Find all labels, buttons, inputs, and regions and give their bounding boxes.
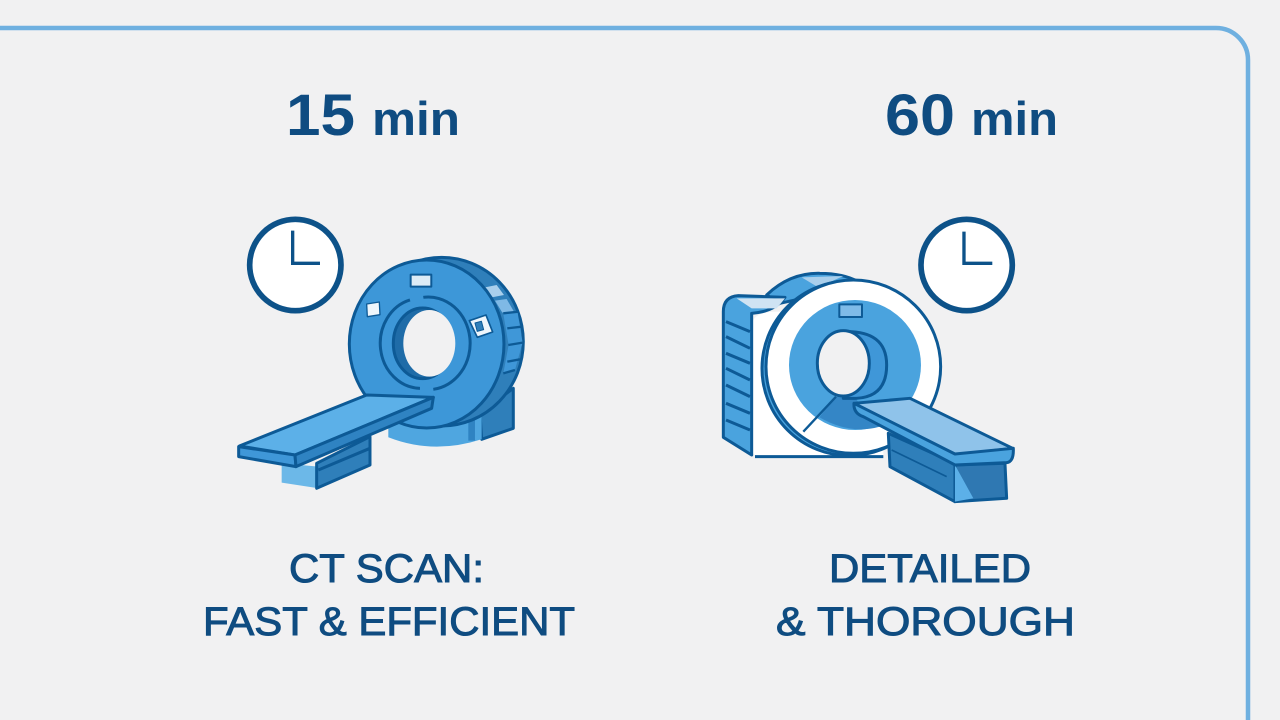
icon: CT scanner <box>239 257 523 488</box>
inner blue disc <box>789 300 921 430</box>
icon: MRI clock <box>921 219 1012 311</box>
panel: CT scan <box>203 83 575 644</box>
lower wedge <box>819 397 880 429</box>
CT caption: FAST & EFFICIENT <box>203 600 575 644</box>
ring rim <box>762 281 937 456</box>
MRI caption: & THOROUGH <box>776 600 1075 644</box>
MRI time: 60 min: min <box>971 92 1058 145</box>
patient table <box>854 398 1013 502</box>
top housing arc <box>767 273 858 303</box>
bore <box>817 331 887 398</box>
patient table <box>239 395 433 488</box>
control panel <box>839 304 862 317</box>
icon: MRI scanner <box>723 273 1013 502</box>
MRI time: 60 min <box>885 83 1058 148</box>
scanner base <box>388 388 513 447</box>
bore <box>380 297 470 389</box>
CT caption: CT SCAN: <box>289 547 484 591</box>
CT time: 15 min <box>286 83 460 148</box>
CT time: 15 min: 15 <box>286 83 355 148</box>
housing body <box>723 296 883 457</box>
MRI caption <box>776 547 1075 644</box>
CT caption <box>203 547 575 644</box>
scanner rear ring <box>360 257 523 426</box>
control panels <box>367 275 493 337</box>
MRI time: 60 min: 60 <box>885 83 955 148</box>
CT time: 15 min: min <box>372 92 460 145</box>
MRI caption: DETAILED <box>829 547 1031 591</box>
icon: CT clock <box>250 219 341 311</box>
panel: MRI scan <box>723 83 1075 644</box>
scanner front disc <box>349 260 504 428</box>
white ring <box>766 280 941 453</box>
